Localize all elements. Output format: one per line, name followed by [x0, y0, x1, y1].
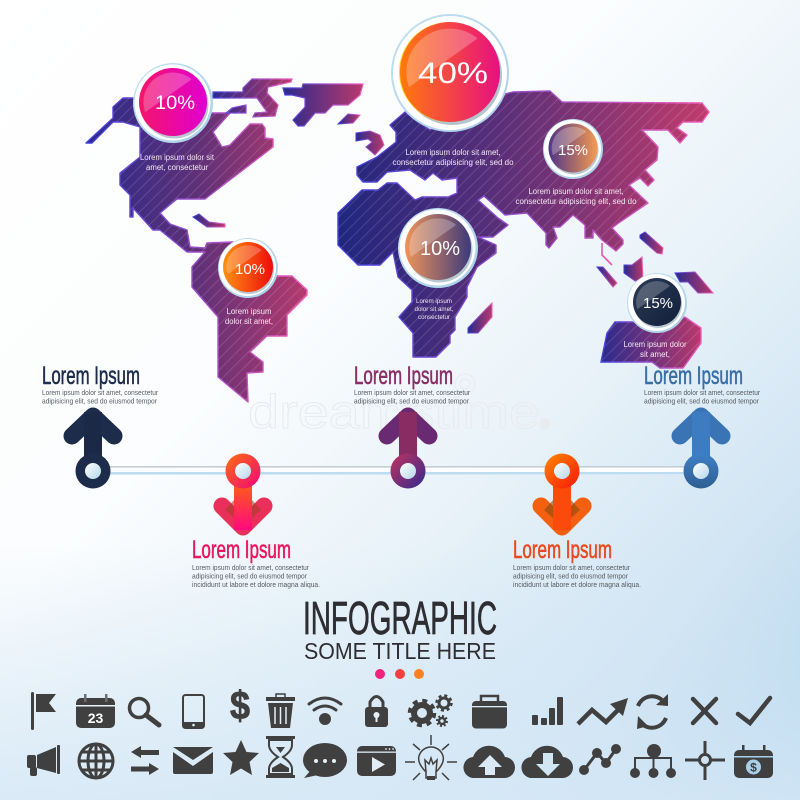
icon: crosshair: [685, 741, 725, 780]
caption: Europe: Lorem ipsum dolor sit amet,: [406, 148, 500, 157]
text block: step 4: adipisicing elit, sed do eiusmod tempor: [513, 574, 629, 580]
icon: trash can: [266, 694, 295, 728]
caption: Australia: [624, 340, 687, 359]
text block: step 5: Lorem ipsum dolor sit amet, consectetur: [644, 390, 761, 397]
icon: calendar with dollar: $: [750, 760, 757, 774]
icon: speech bubble: [303, 743, 347, 778]
marker: up arrow navy: [72, 412, 114, 488]
icon: envelope: [173, 747, 213, 774]
badge: South America 10%: 10%: [235, 261, 265, 278]
text block: step 3: Lorem Ipsum: [354, 362, 453, 390]
text block: step 3: [354, 362, 471, 406]
caption: Africa: dolor sit amet,: [414, 307, 454, 313]
badge: Africa 10%: 10%: [420, 238, 460, 260]
caption: South America: Lorem ipsum: [226, 307, 272, 316]
badge: Europe 40%: [391, 14, 509, 132]
icon: check mark: [738, 698, 770, 723]
landmass: Caribbean island: [193, 214, 225, 227]
icon: globe: [79, 744, 113, 778]
icon: megaphone: [27, 745, 60, 776]
caption: Europe: [392, 148, 514, 167]
text block: step 3: Lorem ipsum dolor sit amet, consectetur: [354, 390, 471, 397]
landmass: Malay peninsula: [602, 243, 612, 265]
badge: Africa 10%: [398, 208, 478, 288]
landmass: Japan: [640, 232, 663, 254]
icon: hierarchy: [630, 744, 676, 778]
title: INFOGRAPHIC: [303, 592, 497, 644]
caption: North America: [140, 153, 215, 172]
text block: step 1: adipisicing elit, sed do eiusmod tempor: [42, 398, 158, 406]
marker: up arrow purple: [387, 412, 429, 488]
caption: South America: [225, 307, 273, 326]
caption: Africa: [414, 299, 454, 321]
badge: Australia 15%: 15%: [643, 295, 673, 312]
icon: trend arrow: [578, 698, 628, 724]
text block: step 1: [42, 362, 159, 406]
timeline bar: [93, 466, 701, 475]
text block: step 4: incididunt ut labore et dolore magna aliqua.: [513, 582, 641, 589]
caption: Africa: Lorem ipsum: [416, 299, 452, 305]
landmass: Madagascar: [468, 303, 492, 333]
world map: [86, 79, 713, 402]
icon: calendar: 23: [88, 710, 103, 726]
icon: calendar with dollar: [734, 745, 773, 778]
landmass: New Guinea: [675, 272, 713, 293]
caption: Europe: consectetur adipisicing elit, sed do: [392, 158, 514, 167]
landmass: Sumatra: [597, 267, 617, 287]
landmass: Greenland: [283, 84, 363, 126]
text block: step 2: [192, 536, 320, 589]
icon: flag: [31, 692, 56, 730]
text block: step 4: Lorem ipsum dolor sit amet, consectetur: [513, 565, 631, 572]
text block: step 2: adipisicing elit, sed do eiusmod tempor: [192, 574, 308, 580]
landmass: United Kingdom: [356, 131, 384, 155]
icon: star: [223, 740, 259, 775]
caption: Australia: Lorem ipsum dolor: [624, 340, 687, 349]
icon: cloud upload: [463, 746, 515, 778]
icon: refresh: [637, 694, 668, 729]
landmass: Borneo: [624, 257, 643, 281]
icon: cloud download: [521, 746, 573, 778]
caption: North America: amet, consectetur: [146, 163, 208, 172]
icon: gears: [410, 696, 452, 726]
icon: wifi: [309, 698, 341, 725]
caption: South America: dolor sit amet,: [225, 317, 273, 326]
icon: calendar: [76, 694, 115, 728]
icon: transfer arrows: [131, 746, 159, 775]
text block: step 5: adipisicing elit, sed do eiusmod tempor: [644, 398, 760, 406]
text block: step 5: Lorem Ipsum: [644, 362, 743, 390]
watermark: [248, 374, 550, 438]
icon: connected dots: [579, 744, 621, 775]
badge: Europe 40%: 40%: [418, 57, 488, 90]
text block: step 4: [513, 536, 641, 589]
badge: Asia 15%: 15%: [558, 142, 588, 159]
icon: dollar: $: [230, 684, 250, 728]
icon: cross: [693, 699, 716, 723]
text block: step 2: Lorem Ipsum: [192, 536, 291, 564]
text block: step 1: Lorem ipsum dolor sit amet, consectetur: [42, 390, 159, 397]
text block: step 1: Lorem Ipsum: [42, 362, 140, 390]
landmass: North and South America: [86, 98, 307, 402]
caption: Asia: [516, 187, 637, 206]
icon: hourglass: [266, 736, 295, 778]
text block: step 4: Lorem Ipsum: [513, 536, 612, 564]
icon set: [27, 684, 773, 780]
icon: magnifier: [130, 698, 159, 725]
icon: video player: [357, 746, 396, 776]
caption: Asia: consectetur adipisicing elit, sed do: [516, 197, 637, 206]
title dots: [375, 669, 424, 679]
marker: down arrow orange: [541, 454, 583, 530]
text block: step 2: incididunt ut labore et dolore magna aliqua.: [192, 582, 320, 589]
subtitle: SOME TITLE HERE: [304, 638, 496, 664]
badge: South America 10%: [218, 238, 278, 298]
caption: Australia: sit amet,: [640, 350, 670, 359]
landmass: Arctic islands: [213, 79, 292, 117]
badge: Australia 15%: [627, 273, 687, 333]
icon: tablet: [183, 695, 204, 728]
watermark: dreamstime: [248, 385, 540, 438]
text block: step 3: adipisicing elit, sed do eiusmod tempor: [354, 398, 470, 406]
icon: briefcase: [472, 696, 507, 728]
text block: step 2: Lorem ipsum dolor sit amet, consectetur: [192, 565, 310, 572]
caption: North America: Lorem ipsum dolor sit: [140, 153, 215, 162]
icon: padlock: [365, 696, 388, 727]
badge: North America 10%: [133, 63, 213, 143]
landmass: Iceland: [338, 114, 360, 124]
badge: North America 10%: 10%: [155, 93, 195, 114]
landmass: Eurasia and Africa: [338, 91, 709, 357]
badge: Asia 15%: [543, 119, 603, 179]
icon: bar chart: [532, 697, 563, 725]
landmass: Australia: [601, 317, 701, 368]
caption: Asia: Lorem ipsum dolor sit amet,: [528, 187, 624, 196]
caption: Africa: consectetur: [418, 315, 450, 321]
text block: step 5: [644, 362, 761, 406]
marker: up arrow blue: [680, 412, 722, 488]
icon: light bulb: [405, 735, 457, 780]
marker: down arrow pink: [222, 454, 264, 530]
